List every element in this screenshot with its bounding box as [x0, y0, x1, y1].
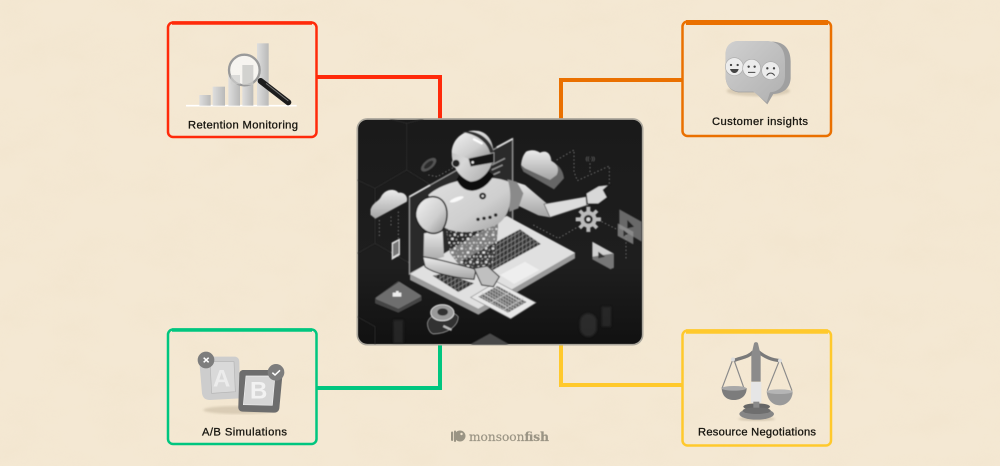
dashed circuits — [379, 150, 626, 258]
floor reflections — [393, 307, 611, 343]
robot left arm — [423, 230, 444, 263]
icon: smartwatch — [427, 305, 458, 334]
connector: yellow — [561, 345, 682, 385]
label: Customer insights — [712, 116, 808, 128]
icon: speech bubble with faces — [725, 41, 791, 104]
icon: phone — [392, 238, 400, 260]
icon: small chip on floor — [471, 333, 509, 350]
tablet — [471, 282, 536, 319]
card: Customer insights — [682, 22, 831, 136]
icon: fish mark — [451, 430, 466, 442]
laptop base — [409, 252, 576, 316]
digital dissolve particles — [449, 224, 499, 268]
robot right arm — [516, 182, 589, 218]
panel: central robot illustration — [357, 119, 643, 350]
icon: wifi signal: ((·)) — [586, 156, 595, 162]
connector: red — [317, 77, 440, 119]
robot torso — [428, 178, 510, 232]
hex background lines — [357, 119, 428, 345]
icon: bar chart with magnifier — [186, 43, 297, 106]
label: Retention Monitoring — [188, 120, 298, 132]
robot left hand — [474, 266, 499, 287]
icon: balance scale — [722, 342, 793, 421]
laptop screen — [409, 139, 513, 274]
connector: green — [317, 345, 440, 388]
icon: video tiles — [618, 209, 642, 244]
dissolve fragments — [446, 223, 498, 273]
robot shoulder — [416, 197, 447, 233]
card: Resource Negotiations — [682, 330, 831, 446]
robot head — [452, 131, 493, 182]
icon: A/B tiles — [198, 352, 284, 414]
logo: monsoonfish — [451, 429, 549, 444]
icon: fingerprint badge — [420, 157, 437, 172]
wordmark: monsoonfish — [469, 429, 549, 444]
connector: orange — [561, 80, 682, 119]
label: A/B Simulations — [202, 426, 287, 438]
icon: A/B tiles: A — [213, 366, 230, 393]
icon: cloud left — [371, 190, 407, 219]
robot hand — [586, 185, 609, 204]
trackpad — [500, 262, 539, 284]
card: A/B Simulations — [168, 330, 316, 444]
icon: A/B tiles: B — [250, 378, 267, 405]
keyboard — [462, 228, 541, 271]
icon: play tile — [592, 242, 614, 269]
label: Resource Negotiations — [698, 426, 816, 438]
icon: gear — [576, 207, 601, 232]
card: Retention Monitoring — [168, 22, 316, 137]
icon: app box — [376, 282, 421, 312]
icon: cloud right — [521, 150, 564, 189]
